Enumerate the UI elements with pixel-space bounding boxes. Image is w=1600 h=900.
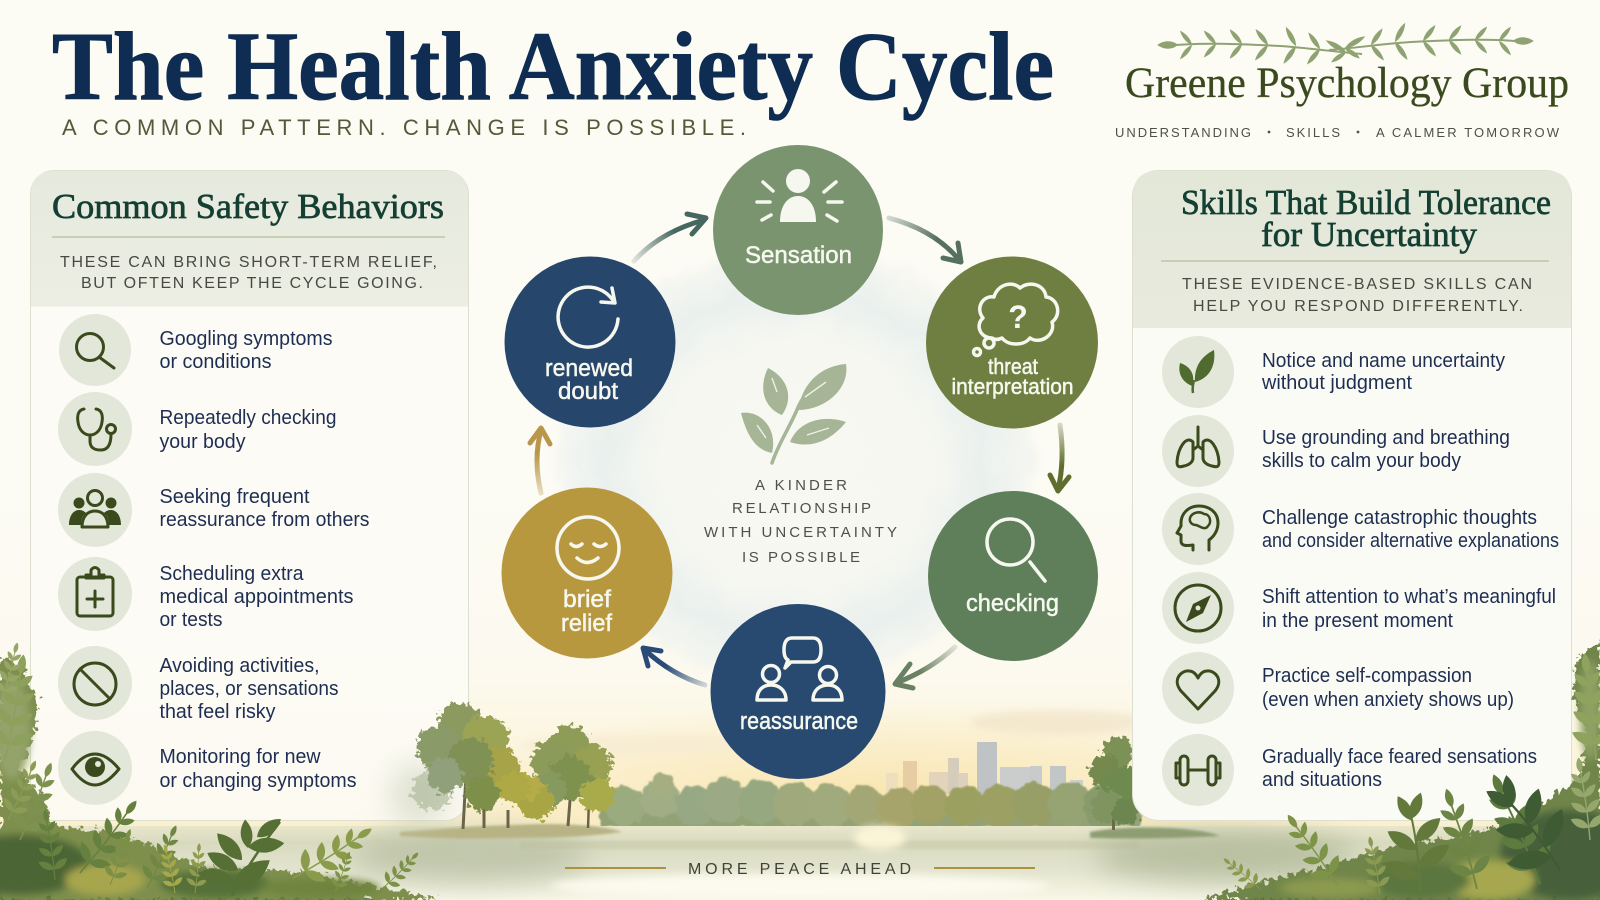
- large leaf sprig: [196, 814, 285, 896]
- text: Seeking frequent: [160, 486, 310, 508]
- text: or tests: [160, 609, 222, 631]
- tree: right shore: [1089, 736, 1144, 830]
- city skyline: [886, 742, 1083, 794]
- icon: lungs: [1177, 427, 1219, 467]
- heading: Skills That Build Tolerance: [1181, 183, 1551, 222]
- arrow: brief relief to renewed doubt: [530, 428, 550, 493]
- node: checking: [928, 491, 1098, 661]
- label: reassurance: [740, 708, 858, 735]
- center message: WITH UNCERTAINTY: [704, 524, 897, 541]
- icon: magnifier: [76, 334, 114, 368]
- label: Sensation: [745, 242, 852, 269]
- arrow: threat to checking: [1050, 425, 1069, 491]
- shoreline islands: [400, 824, 1220, 839]
- panel intro: [60, 254, 437, 292]
- behavior: avoiding: [58, 646, 338, 723]
- skill: self-compassion: [1162, 652, 1514, 724]
- text: Practice self-compassion: [1262, 665, 1472, 687]
- text: [1262, 586, 1556, 632]
- foreground foliage: left: [0, 639, 440, 900]
- text: Challenge catastrophic thoughts: [1262, 507, 1537, 529]
- heading: [1181, 183, 1551, 254]
- arrow: reassurance to brief relief: [643, 648, 705, 685]
- panel intro: HELP YOU RESPOND DIFFERENTLY.: [1193, 298, 1523, 315]
- text: and consider alternative explanations: [1262, 530, 1559, 552]
- cycle diagram: [502, 145, 1098, 779]
- node: brief relief: [502, 488, 672, 658]
- organization name: Greene Psychology Group: [1125, 60, 1569, 107]
- behavior: body checking: [58, 392, 336, 466]
- center wash: [550, 240, 1040, 690]
- label: relief: [561, 610, 612, 637]
- text: Use grounding and breathing: [1262, 427, 1510, 449]
- footer: more peace ahead: MORE PEACE AHEAD: [688, 861, 911, 878]
- text: Googling symptoms: [160, 328, 332, 350]
- icon: clipboard with plus: [77, 568, 113, 616]
- node: reassurance: [710, 604, 886, 779]
- title: The Health Anxiety Cycle: [52, 13, 1054, 120]
- panel header band: [31, 171, 468, 306]
- label: doubt: [558, 378, 618, 405]
- label: renewed: [545, 355, 633, 382]
- text: [160, 746, 356, 792]
- water: [0, 826, 1600, 900]
- icon: circular arrow: [558, 287, 618, 347]
- text: [160, 655, 338, 723]
- text: Shift attention to what’s meaningful: [1262, 586, 1556, 608]
- text: Scheduling extra: [160, 563, 304, 585]
- icon: prohibited sign: [74, 663, 116, 705]
- label: [561, 586, 612, 637]
- text: in the present moment: [1262, 610, 1453, 632]
- center message: RELATIONSHIP: [732, 500, 871, 517]
- tagline: A CALMER TOMORROW: [1376, 125, 1560, 140]
- panel intro: BUT OFTEN KEEP THE CYCLE GOING.: [81, 275, 423, 292]
- node: sensation: [713, 145, 883, 315]
- icon: thought cloud with question mark: ?: [1008, 299, 1028, 335]
- icon: compass: [1175, 585, 1221, 631]
- skill: shift attention: [1162, 572, 1556, 644]
- panel intro: THESE EVIDENCE-BASED SKILLS CAN: [1182, 276, 1532, 293]
- node: renewed doubt: [504, 256, 676, 428]
- tree: mid lake: [515, 725, 614, 828]
- heading: Common Safety Behaviors: [52, 187, 444, 226]
- text: and situations: [1262, 769, 1382, 791]
- text: Gradually face feared sensations: [1262, 746, 1537, 768]
- icon: two people with speech bubble: [757, 638, 842, 700]
- behavior: monitoring: [58, 731, 356, 805]
- skill: gradual exposure: [1162, 734, 1537, 806]
- icon: magnifier: [987, 519, 1045, 581]
- text: Avoiding activities,: [160, 655, 320, 677]
- center message: A KINDER: [755, 477, 847, 494]
- panel intro: THESE CAN BRING SHORT-TERM RELIEF,: [60, 254, 437, 271]
- arrow: checking to reassurance: [895, 647, 955, 688]
- text: places, or sensations: [160, 678, 338, 700]
- icon: thought cloud with question mark: [974, 284, 1058, 356]
- behavior: googling: [59, 314, 332, 386]
- icon: leaf sprout: [1179, 350, 1214, 393]
- text: [1262, 665, 1514, 711]
- skill: notice and name: [1162, 336, 1505, 408]
- text: your body: [160, 431, 246, 453]
- tagline: SKILLS: [1286, 125, 1340, 140]
- text: [1261, 350, 1505, 394]
- behavior: medical appointments: [58, 557, 354, 631]
- text: or changing symptoms: [160, 770, 356, 792]
- panel intro: [1182, 276, 1532, 315]
- label: interpretation: [952, 374, 1074, 399]
- icon: smiling face: [557, 517, 619, 579]
- skill: challenge thoughts: [1162, 493, 1559, 565]
- text: without judgment: [1261, 372, 1412, 394]
- center message: [704, 477, 897, 566]
- text: [160, 407, 336, 453]
- text: [160, 486, 370, 531]
- icon: person with rays: [757, 169, 842, 222]
- subtitle: A COMMON PATTERN. CHANGE IS POSSIBLE.: [62, 115, 746, 140]
- text: Monitoring for new: [160, 746, 321, 768]
- center message: IS POSSIBLE: [742, 549, 860, 566]
- icon: eye: [72, 754, 119, 785]
- text: medical appointments: [160, 586, 354, 608]
- heading: for Uncertainty: [1261, 215, 1477, 254]
- text: skills to calm your body: [1262, 450, 1461, 472]
- icon: group of people: [69, 490, 121, 527]
- label: [545, 355, 633, 405]
- node: threat interpretation: [926, 256, 1098, 428]
- text: [1262, 507, 1559, 552]
- leaf garland: [1157, 22, 1534, 66]
- label: brief: [563, 586, 611, 613]
- label: checking: [966, 590, 1059, 617]
- distant tree line: [600, 773, 1140, 828]
- text: that feel risky: [160, 701, 276, 723]
- text: reassurance from others: [160, 509, 370, 531]
- foreground foliage: right: [1200, 640, 1600, 900]
- icon: heart: [1177, 671, 1219, 709]
- behavior: reassurance seeking: [58, 473, 370, 547]
- text: [160, 563, 354, 631]
- tagline: [1115, 125, 1560, 140]
- skill: grounding and breathing: [1162, 415, 1510, 487]
- label: threat: [988, 354, 1038, 379]
- panel header band: [1133, 171, 1571, 328]
- text: Notice and name uncertainty: [1262, 350, 1505, 372]
- left panel: common safety behaviors: [30, 170, 468, 820]
- text: or conditions: [160, 351, 272, 373]
- icon: stethoscope: [78, 409, 116, 450]
- tree: foggy lakeside tree: [390, 703, 530, 829]
- text: [1262, 427, 1510, 472]
- tagline: UNDERSTANDING: [1115, 125, 1251, 140]
- icon: dumbbell: [1176, 756, 1220, 785]
- text: [160, 328, 332, 373]
- arrow: renewed doubt to sensation: [634, 214, 706, 261]
- center sprig icon: [741, 364, 846, 463]
- text: Repeatedly checking: [160, 407, 336, 429]
- logo block: [1115, 22, 1569, 140]
- arrow: sensation to threat: [889, 218, 961, 262]
- text: [1262, 746, 1537, 791]
- text: (even when anxiety shows up): [1262, 689, 1514, 711]
- icon: head with brain: [1177, 506, 1218, 550]
- label: [952, 354, 1074, 399]
- right panel: skills that build tolerance: [1132, 170, 1572, 820]
